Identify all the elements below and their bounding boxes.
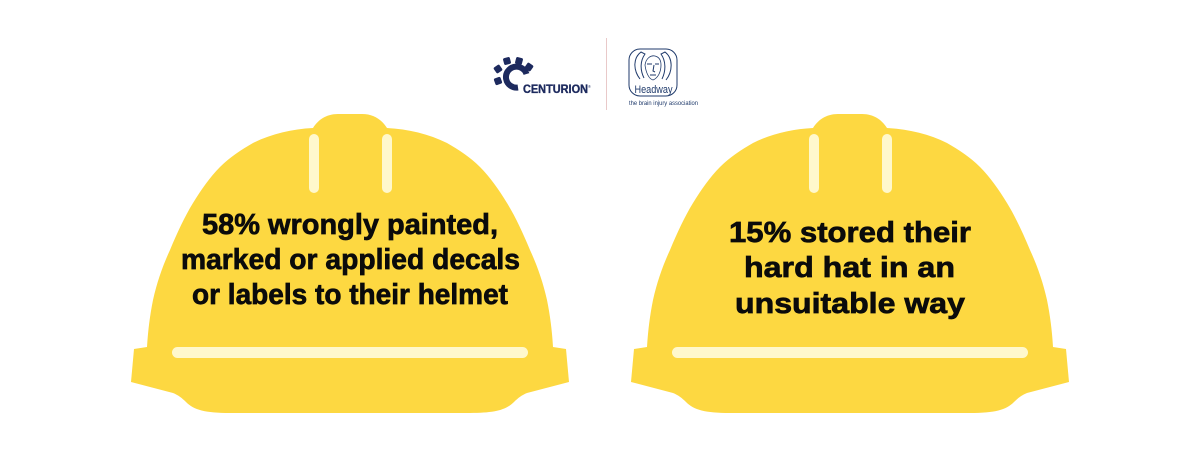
tagline: the brain injury association: the brain injury association	[629, 101, 698, 107]
text: 15% statistic: unsuitable way	[735, 288, 965, 320]
text: 58% statistic	[181, 209, 520, 311]
highlight: left vent	[309, 134, 319, 193]
highlight: right vent	[382, 134, 392, 193]
logo: Headway	[629, 49, 698, 107]
logo: Centurion	[493, 57, 591, 96]
text: 58% statistic: marked or applied decals	[181, 244, 520, 276]
registered mark: ®	[588, 84, 591, 89]
highlight: brim bar	[172, 347, 528, 358]
text: 15% statistic: hard hat in an	[744, 252, 955, 284]
highlight: left vent	[809, 134, 819, 193]
icon: hard hat shape	[131, 114, 569, 413]
icon: Centurion sun mark	[493, 57, 534, 88]
highlight: right vent	[882, 134, 892, 193]
divider between logos	[606, 38, 607, 110]
text: 15% statistic	[729, 217, 971, 320]
icon: hard hat shape	[631, 114, 1069, 413]
panel: left hard hat	[131, 114, 569, 413]
text: 58% statistic: or labels to their helmet	[192, 279, 508, 311]
wordmark: Centurion: CENTURION	[523, 84, 588, 96]
wordmark: Headway: Headway	[634, 84, 673, 96]
panel: right hard hat	[631, 114, 1069, 413]
text: 15% statistic: 15% stored their	[729, 217, 971, 249]
icon: Headway face emblem	[629, 49, 677, 96]
text: 58% statistic: 58% wrongly painted,	[202, 209, 498, 241]
highlight: brim bar	[672, 347, 1028, 358]
